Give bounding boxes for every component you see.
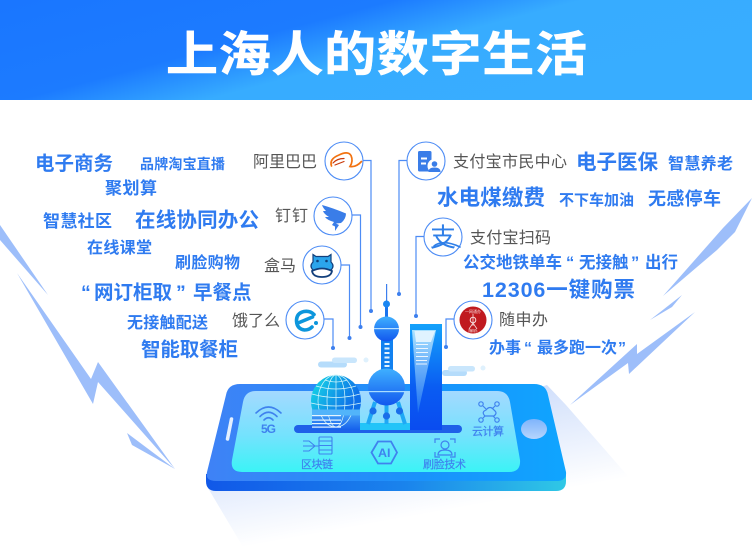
labels: right services: 最多跑一次 — [537, 338, 617, 357]
labels: right services: 出行 — [645, 253, 678, 272]
labels: right services: “ — [524, 340, 532, 357]
connector: citizen centre — [397, 160, 408, 296]
icon: Suishenban — [454, 301, 492, 339]
labels: left services: 品牌淘宝直播 — [140, 156, 225, 172]
phone — [206, 384, 566, 491]
labels: left services: 早餐点 — [193, 282, 252, 304]
icon: Alipay — [424, 218, 462, 256]
labels: app names: 钉钉 — [275, 207, 308, 225]
connector: Hema — [340, 265, 352, 340]
dark base bar — [294, 425, 462, 433]
icon: DingTalk — [314, 197, 352, 235]
labels: left services: 网订柜取 — [94, 282, 173, 304]
labels: right services: 智慧养老 — [668, 154, 733, 173]
phone body — [207, 384, 566, 481]
labels: app names: 饿了么 — [232, 312, 280, 330]
labels: left services: 在线课堂 — [87, 238, 152, 257]
labels: left services: 智能取餐柜 — [141, 339, 238, 361]
icon: Suishenban: 随申办 — [468, 328, 478, 333]
icon: blockchain — [301, 437, 333, 471]
labels: left services: 刷脸购物 — [175, 253, 240, 272]
labels: right services: 无接触 — [579, 253, 629, 272]
icon: Eleme — [286, 301, 324, 339]
labels: right services — [437, 151, 733, 357]
icon: Hema — [303, 246, 341, 284]
labels: app names: 支付宝扫码 — [470, 229, 551, 247]
labels: left services: 无接触配送 — [127, 314, 208, 332]
oriental pearl tower — [360, 284, 410, 430]
connector: Alipay scan — [414, 236, 425, 318]
labels: app names: 盒马 — [264, 257, 296, 275]
labels: right services: 电子医保 — [576, 151, 658, 174]
labels: right services: ” — [618, 340, 626, 357]
connector: DingTalk — [351, 215, 362, 329]
icon: Suishenban: 一网通办 — [465, 308, 481, 314]
header banner — [0, 0, 752, 100]
labels: right services: 办事 — [489, 338, 521, 357]
cloud: right — [442, 366, 486, 376]
labels: left services — [35, 153, 259, 361]
labels: left services: 电子商务 — [35, 153, 113, 175]
home button — [521, 419, 547, 439]
icon: cloud computing — [472, 402, 504, 438]
skyscraper — [410, 324, 442, 430]
icon: blockchain: 区块链 — [301, 457, 333, 471]
labels: app names — [232, 153, 567, 330]
icon: AI: AI — [378, 446, 390, 460]
labels: left services: ” — [176, 282, 186, 304]
speaker — [228, 419, 232, 439]
title: 上海人的数字生活 — [166, 28, 587, 82]
labels: left services: 智慧社区 — [43, 211, 112, 231]
phone side — [206, 472, 566, 491]
connector: Alibaba — [362, 160, 373, 313]
labels: left services: “ — [81, 282, 91, 304]
icon: face scan: 刷脸技术 — [423, 457, 466, 471]
icon: AI — [372, 442, 397, 464]
lightning bolt: left — [0, 225, 175, 469]
lightning bolt: right — [570, 198, 752, 405]
icon: cloud computing: 云计算 — [472, 424, 504, 438]
labels: app names: 阿里巴巴 — [253, 153, 317, 171]
labels: right services: 无感停车 — [648, 188, 721, 209]
labels: right services: 12306一键购票 — [482, 278, 635, 302]
connector: Eleme — [323, 319, 335, 350]
globe building — [311, 375, 361, 430]
labels: left services: 聚划算 — [105, 178, 157, 198]
labels: app names: 随申办 — [499, 311, 548, 329]
icon: face scan — [423, 439, 466, 471]
labels: left services: 在线协同办公 — [135, 209, 259, 232]
phone screen — [232, 391, 520, 472]
icon: citizen centre — [407, 142, 445, 180]
phone shadow — [208, 385, 700, 547]
labels: right services: 不下车加油 — [559, 191, 634, 209]
cloud: left — [318, 358, 368, 368]
labels: right services: ” — [631, 254, 639, 272]
labels: right services: 公交地铁单车 — [463, 252, 562, 272]
labels: right services: “ — [566, 254, 574, 272]
labels: app names: 支付宝市民中心 — [453, 153, 567, 171]
connector: Suishenban — [444, 319, 455, 349]
icon: 5G: 5G — [261, 422, 276, 436]
icon: Alibaba — [325, 142, 363, 180]
icon: Alipay: 支 — [430, 222, 456, 252]
labels: right services: 水电煤缴费 — [437, 186, 545, 210]
icon: 5G — [256, 407, 281, 436]
